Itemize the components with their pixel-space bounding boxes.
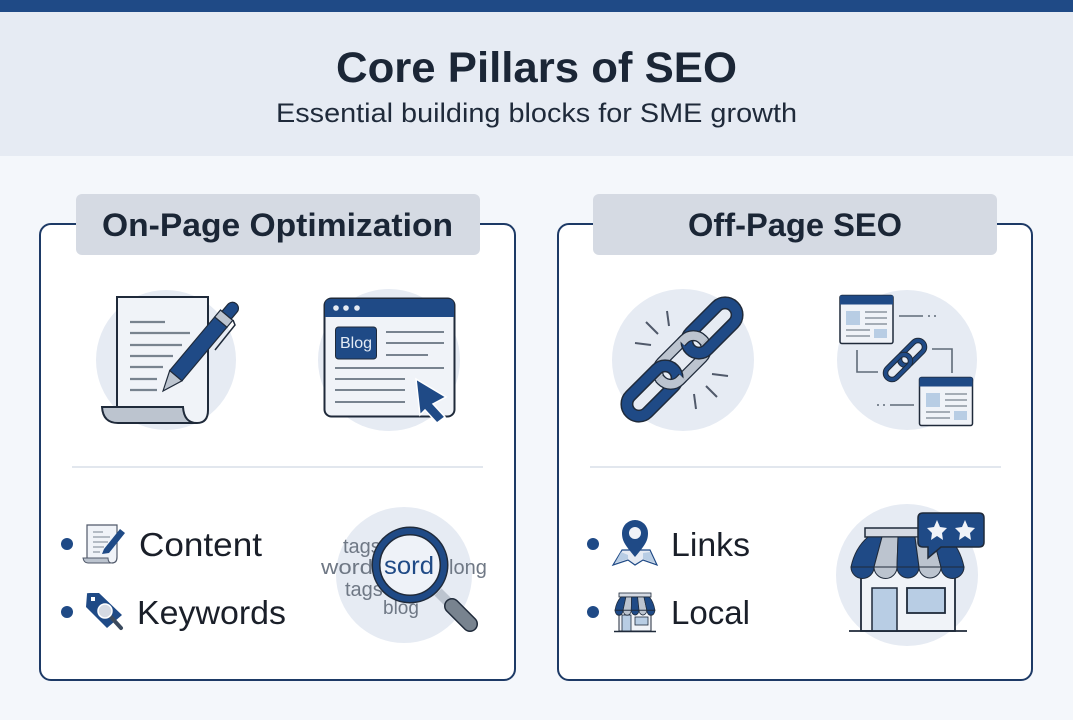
header band <box>0 0 1073 156</box>
list: keywords bullet: Keywords <box>137 594 286 631</box>
list: content bullet: Content <box>139 526 262 563</box>
icon: storefront with rating <box>836 504 984 646</box>
title: Core Pillars of SEO <box>336 44 737 92</box>
icon: keyword tag <box>86 593 122 628</box>
icon: document and pen <box>96 290 242 430</box>
icon: small storefront <box>614 593 656 632</box>
icon: magnifier over keywords: sord <box>384 552 434 580</box>
list: local bullet: Local <box>671 594 750 631</box>
heading: off-page seo: Off-Page SEO <box>688 207 902 243</box>
web page 1 <box>840 296 893 344</box>
icon: magnifier over keywords: blog <box>383 598 419 619</box>
icon: linked web pages <box>837 290 977 430</box>
icon: magnifier over keywords: long <box>449 557 487 579</box>
list: links bullet: Links <box>671 526 750 563</box>
icon: magnifier over keywords <box>320 507 487 643</box>
rating bubble <box>918 513 984 558</box>
heading: on-page optimization <box>76 194 480 255</box>
icon: magnifier over keywords: tags <box>345 579 383 601</box>
list: keywords bullet <box>61 593 286 631</box>
icon: blog page with cursor <box>318 289 460 431</box>
awning <box>851 537 964 578</box>
list: content bullet <box>61 525 262 563</box>
heading: off-page seo <box>593 194 997 255</box>
list: local bullet <box>587 593 750 632</box>
icon: chain link <box>612 289 754 431</box>
panel: on-page optimization <box>40 194 515 680</box>
icon: blog page with cursor: Blog <box>340 335 372 352</box>
heading: on-page optimization: On-Page Optimization <box>102 207 453 243</box>
icon: magnifier over keywords: word <box>320 557 373 579</box>
web page 2 <box>920 378 972 426</box>
icon: small document <box>83 525 125 563</box>
panel: off-page seo <box>558 194 1032 680</box>
list: links bullet <box>587 520 750 565</box>
icon: magnifier over keywords: tags <box>343 536 381 558</box>
icon: map pin <box>613 520 657 565</box>
subtitle: Essential building blocks for SME growth <box>276 98 797 128</box>
